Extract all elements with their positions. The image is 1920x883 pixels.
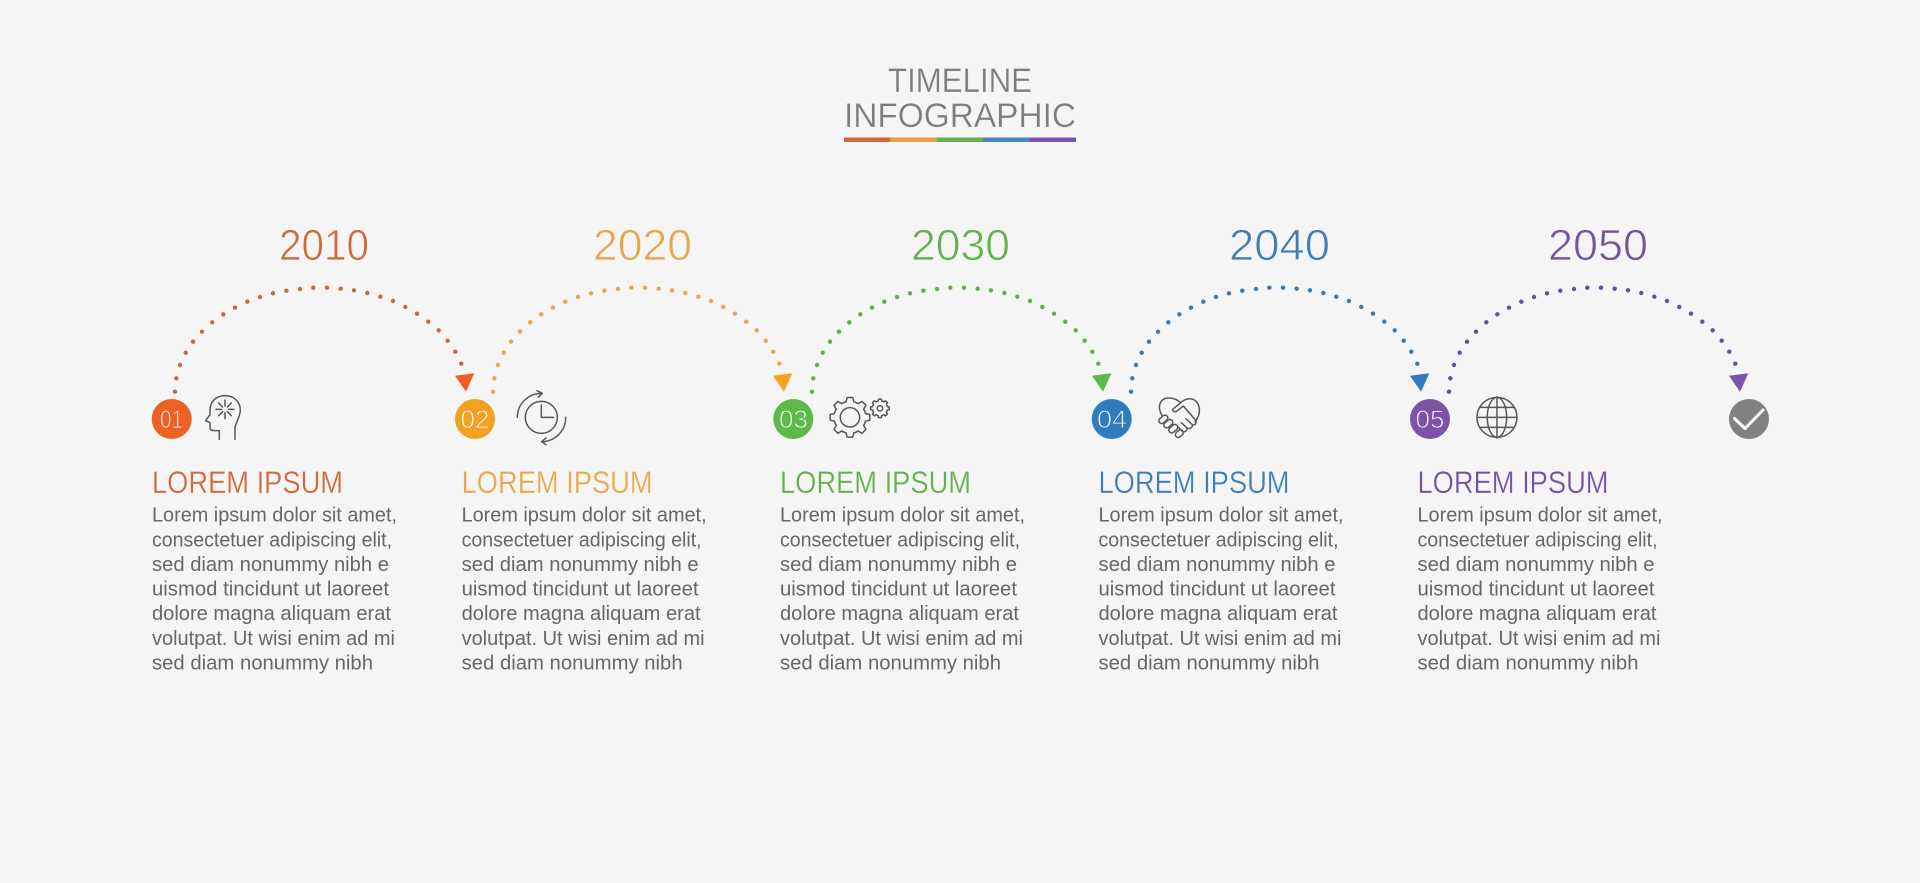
step 5 body text: dolore magna aliquam erat — [1418, 602, 1657, 625]
step 4 body text: sed diam nonummy nibh — [1098, 651, 1320, 674]
icon: clock with circular arrows — [517, 391, 566, 445]
icon: gears — [830, 398, 889, 437]
year 2030: 2030 — [911, 221, 1010, 270]
step 4 heading: LOREM IPSUM — [1098, 464, 1290, 500]
step badge 05: 05 — [1416, 406, 1444, 434]
step 5 body text: volutpat. Ut wisi enim ad mi — [1418, 627, 1660, 650]
step 5 body text — [1418, 504, 1662, 674]
step 1 body text — [152, 504, 397, 674]
step 2 body text: dolore magna aliquam erat — [462, 602, 701, 625]
step badge 05 — [1410, 399, 1450, 439]
step 4 body text: uismod tincidunt ut laoreet — [1098, 578, 1336, 601]
step 5 body text: consectetuer adipiscing elit, — [1418, 528, 1658, 552]
title: TIMELINE — [888, 62, 1032, 100]
step 5 body text: sed diam nonummy nibh e — [1418, 553, 1654, 576]
dotted arc 2040 — [1129, 286, 1420, 394]
step badge 02 — [455, 399, 495, 439]
step 3 heading: LOREM IPSUM — [780, 464, 971, 500]
step 1 body text: consectetuer adipiscing elit, — [152, 528, 392, 552]
dotted arc 2020 — [491, 286, 782, 394]
icon: globe — [1477, 397, 1517, 438]
dotted arc 2010 — [173, 286, 464, 394]
step 2 body text: volutpat. Ut wisi enim ad mi — [462, 627, 705, 650]
step 1 body text: uismod tincidunt ut laoreet — [152, 578, 389, 601]
arrowhead 4 — [1410, 373, 1429, 392]
step 4 body text: volutpat. Ut wisi enim ad mi — [1098, 627, 1342, 650]
step 2 body text: Lorem ipsum dolor sit amet, — [462, 504, 707, 527]
step 4 body text: sed diam nonummy nibh e — [1098, 553, 1336, 576]
step badge 04 — [1092, 399, 1132, 439]
step 1 body text: Lorem ipsum dolor sit amet, — [152, 504, 397, 527]
title: INFOGRAPHIC — [844, 97, 1076, 135]
step 3 body text: dolore magna aliquam erat — [780, 602, 1019, 625]
arrowhead 1 — [455, 373, 474, 392]
step 3 body text — [780, 504, 1025, 674]
step 3 body text: consectetuer adipiscing elit, — [780, 528, 1020, 552]
step 3 text — [780, 464, 1025, 674]
step badge 03 — [773, 399, 813, 439]
step 4 body text — [1098, 504, 1344, 674]
step 1 body text: dolore magna aliquam erat — [152, 602, 391, 625]
year 2020: 2020 — [593, 221, 692, 270]
arrowhead 3 — [1092, 373, 1111, 392]
year 2050: 2050 — [1548, 221, 1648, 270]
step 2 body text — [462, 504, 707, 674]
step badge 03: 03 — [779, 406, 808, 434]
step 3 body text: sed diam nonummy nibh e — [780, 553, 1017, 576]
step 2 text — [462, 464, 707, 674]
step 3 body text: sed diam nonummy nibh — [780, 651, 1001, 674]
title underline: five-colour bar — [844, 138, 1076, 142]
step 1 body text: sed diam nonummy nibh — [152, 651, 373, 674]
arrowhead 5 — [1729, 373, 1748, 392]
step 2 body text: sed diam nonummy nibh e — [462, 553, 699, 576]
step 3 body text: uismod tincidunt ut laoreet — [780, 578, 1017, 601]
step 5 text — [1418, 464, 1662, 674]
step 2 body text: sed diam nonummy nibh — [462, 651, 683, 674]
step badge 01 — [152, 399, 192, 439]
arrowhead 2 — [773, 373, 792, 392]
step 1 text — [152, 464, 397, 674]
step 5 body text: Lorem ipsum dolor sit amet, — [1418, 504, 1662, 527]
step 3 body text: Lorem ipsum dolor sit amet, — [780, 504, 1025, 527]
title — [844, 62, 1076, 135]
step 2 heading: LOREM IPSUM — [462, 464, 653, 500]
step 1 body text: volutpat. Ut wisi enim ad mi — [152, 627, 395, 650]
step 5 body text: sed diam nonummy nibh — [1418, 651, 1638, 674]
step 1 heading: LOREM IPSUM — [152, 464, 343, 500]
step 4 body text: dolore magna aliquam erat — [1098, 602, 1338, 625]
end badge: check mark — [1729, 399, 1769, 439]
dotted arc 2030 — [810, 286, 1100, 394]
dotted arc 2050 — [1447, 286, 1738, 394]
step 2 body text: uismod tincidunt ut laoreet — [462, 578, 699, 601]
step 5 body text: uismod tincidunt ut laoreet — [1418, 578, 1655, 601]
step badge 02: 02 — [460, 406, 490, 434]
step 5 heading: LOREM IPSUM — [1418, 464, 1608, 500]
icon: head with idea — [206, 396, 240, 439]
icon: handshake — [1158, 398, 1199, 439]
step badge 01: 01 — [160, 406, 183, 434]
year 2040: 2040 — [1229, 221, 1330, 270]
step 3 body text: volutpat. Ut wisi enim ad mi — [780, 627, 1023, 650]
step 4 body text: Lorem ipsum dolor sit amet, — [1098, 504, 1344, 527]
step 4 text — [1098, 464, 1344, 674]
year 2010: 2010 — [279, 221, 369, 270]
step badge 04: 04 — [1097, 406, 1127, 434]
step 2 body text: consectetuer adipiscing elit, — [462, 528, 702, 552]
step 4 body text: consectetuer adipiscing elit, — [1098, 528, 1338, 552]
step 1 body text: sed diam nonummy nibh e — [152, 553, 389, 576]
